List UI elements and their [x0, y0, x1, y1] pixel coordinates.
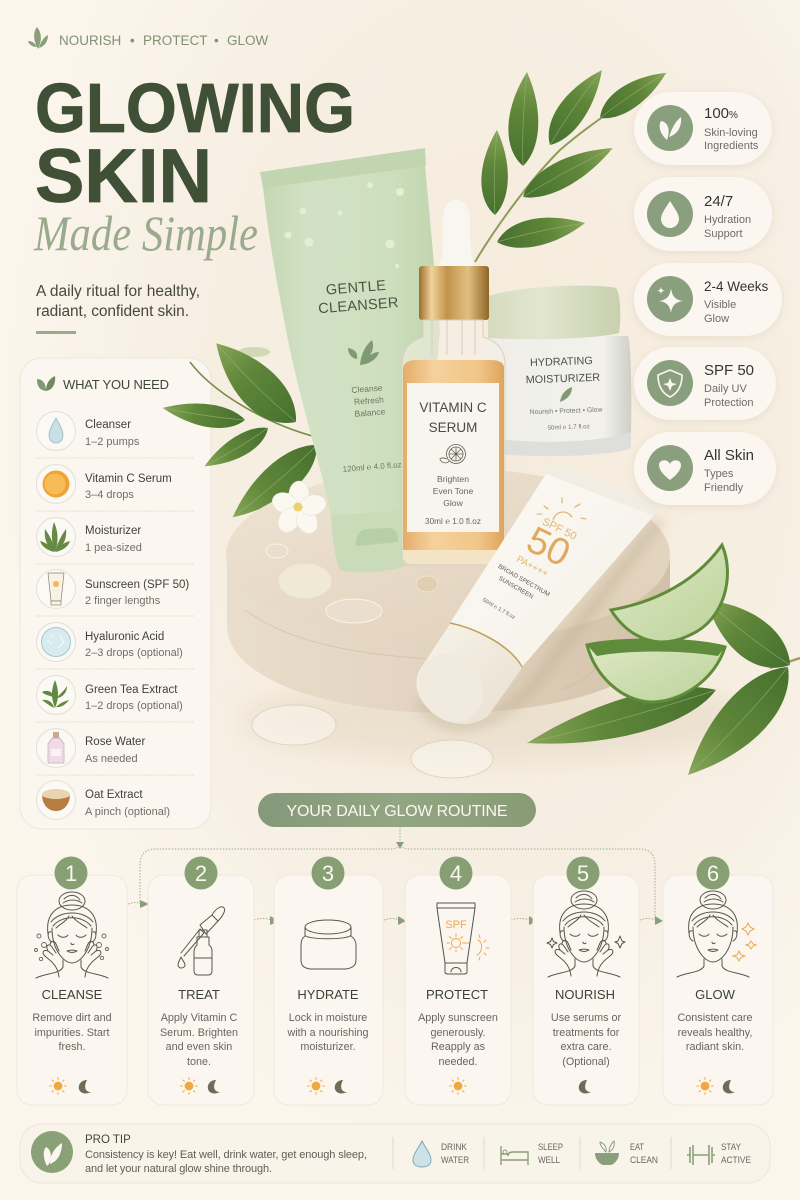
step 1: cleanse: impurities. Start	[34, 1027, 110, 1039]
sunscreen label: BROAD SPECTRUM	[497, 563, 551, 598]
habit: sleep well: WELL	[538, 1155, 560, 1165]
tip text: Consistency is key! Eat well, drink water, get enough sleep,	[85, 1149, 367, 1161]
step 3: hydrate: Lock in moisture	[289, 1012, 367, 1024]
habit: eat clean: EAT	[630, 1142, 644, 1152]
item: rose water	[36, 728, 145, 768]
habit: sleep well: SLEEP	[538, 1142, 563, 1152]
item: vitamin C serum: Vitamin C Serum	[85, 473, 172, 485]
step 5: nourish: NOURISH	[555, 987, 615, 1002]
panel card	[20, 358, 211, 829]
routine connector	[140, 827, 655, 920]
sunscreen label: SUNSCREEN	[497, 575, 534, 600]
habit: sleep well	[501, 1142, 563, 1165]
jar: hydrating moisturizer	[488, 286, 631, 456]
tube cap	[331, 507, 425, 572]
jar label: HYDRATING	[530, 355, 593, 369]
icon: glowing face	[677, 891, 756, 977]
step 1: cleanse: fresh.	[58, 1041, 86, 1053]
tagline text: •	[214, 33, 219, 48]
item: green tea extract	[36, 676, 183, 714]
stat: 100%: Skin-loving	[704, 127, 758, 139]
stat: SPF 50: Daily UV	[704, 383, 747, 395]
icon: face nourishing	[547, 891, 625, 977]
habit: eat clean	[595, 1141, 658, 1165]
icon: face cleansing	[34, 892, 108, 978]
step 5: nourish: Use serums or	[551, 1012, 621, 1024]
habit: stay active: STAY	[721, 1142, 741, 1152]
tip text: and let your natural glow shine through.	[85, 1163, 272, 1175]
habit: stay active	[687, 1142, 751, 1165]
icon: citrus slice	[440, 444, 466, 464]
item: rose water: As needed	[85, 753, 138, 765]
step 5: nourish: 5	[577, 861, 589, 886]
stat: SPF 50: Protection	[704, 397, 754, 409]
step 3: hydrate: 3	[322, 861, 334, 886]
stat: 100%: 100%	[704, 105, 738, 122]
header tagline	[28, 27, 269, 49]
routine banner	[258, 793, 536, 827]
tube: gentle cleanser	[260, 148, 440, 572]
branch: top-right leaves	[475, 62, 672, 262]
stats column	[634, 92, 782, 505]
item: rose water: Rose Water	[85, 736, 145, 748]
cleanser label: Refresh	[354, 394, 384, 407]
jar lid	[488, 286, 620, 339]
step 4: protect: Reapply as	[431, 1041, 486, 1053]
sunscreen label: 50	[520, 519, 576, 575]
stat: all skin: Friendly	[704, 482, 744, 494]
serum label text: VITAMIN C	[419, 400, 487, 415]
cleanser label: 120ml ℮ 4.0 fl.oz	[342, 460, 402, 474]
sunscreen cap	[416, 624, 522, 724]
tube crimp	[260, 148, 426, 188]
glass neck and shoulder	[402, 320, 505, 565]
step 3: hydrate	[274, 856, 383, 1105]
stat: all skin: Types	[704, 468, 734, 480]
item: cleanser: 1–2 pumps	[85, 436, 140, 448]
sunscreen label	[481, 498, 586, 621]
step 2: treat: TREAT	[178, 987, 220, 1002]
title	[33, 69, 355, 261]
cleanser label: Cleanse	[351, 382, 383, 395]
icon: dropper and bottle	[178, 907, 225, 975]
stat: 2-4 weeks: Visible	[704, 299, 736, 311]
serum label	[407, 383, 499, 532]
cleanser label	[316, 277, 412, 475]
item: oat extract: Oat Extract	[85, 789, 143, 801]
icon: sunscreen tube: SPF	[445, 919, 467, 931]
habit: drink water	[413, 1141, 469, 1167]
serum label text: Even Tone	[433, 486, 473, 496]
item: green tea extract: Green Tea Extract	[85, 684, 178, 696]
soft shadow light patches	[240, 680, 760, 760]
tagline text: •	[130, 33, 135, 48]
step 5: nourish	[533, 856, 639, 1105]
item: cleanser	[36, 412, 140, 450]
step 1: cleanse	[17, 856, 127, 1105]
step 2: treat: Serum. Brighten	[160, 1027, 238, 1039]
marble pedestal	[226, 468, 670, 713]
icon: cleanser sprig	[348, 340, 379, 365]
sunscreen shadow	[420, 520, 660, 725]
icon: jar	[301, 920, 356, 969]
tagline text: NOURISH	[59, 33, 121, 48]
title: GLOWING	[35, 69, 355, 147]
step 1: cleanse: 1	[65, 861, 77, 886]
step 3: hydrate: moisturizer.	[300, 1041, 356, 1053]
habit: drink water: WATER	[441, 1155, 469, 1165]
tube: SPF 50 sunscreen	[406, 462, 662, 735]
step 6: glow: 6	[707, 861, 719, 886]
tip text: PRO TIP	[85, 1134, 131, 1146]
pro tip bar	[20, 1124, 770, 1183]
step 1: cleanse: CLEANSE	[42, 987, 103, 1002]
stat: 100%: Ingredients	[704, 140, 759, 152]
habit: drink water: DRINK	[441, 1142, 467, 1152]
aloe and leaves: bottom right	[523, 545, 800, 792]
step 2: treat	[148, 856, 254, 1105]
title: Made Simple	[33, 205, 258, 261]
tagline text: PROTECT	[143, 33, 208, 48]
step 6: glow: GLOW	[695, 987, 736, 1002]
tube body	[263, 165, 440, 516]
branch: left leaves	[161, 330, 329, 531]
step 6: glow: radiant skin.	[686, 1041, 744, 1053]
routine steps	[17, 856, 773, 1105]
step 6: glow	[663, 856, 773, 1105]
step 3: hydrate: HYDRATE	[297, 987, 359, 1002]
habit: eat clean: CLEAN	[630, 1155, 658, 1165]
stat: all skin: All Skin	[704, 447, 754, 464]
aloe slice upper	[611, 545, 727, 642]
arrows between steps	[128, 900, 663, 925]
item: oat extract: A pinch (optional)	[85, 806, 170, 818]
aloe slice lower	[587, 640, 725, 702]
cleanser label: Balance	[354, 406, 386, 419]
jar label: MOISTURIZER	[526, 372, 601, 386]
icon: leaf	[44, 1143, 62, 1166]
step 5: nourish: extra care.	[560, 1041, 612, 1053]
serum label text: Glow	[443, 498, 464, 508]
stat: 2-4 weeks: 2-4 Weeks	[704, 279, 769, 294]
stat: 100%	[634, 92, 772, 165]
item: oat extract	[36, 780, 170, 820]
step 6: glow: reveals healthy,	[678, 1027, 752, 1039]
sunscreen label: 50ml ℮ 1.7 fl.oz	[481, 597, 516, 621]
bottle: vitamin C serum	[402, 200, 505, 565]
icon: sunscreen tube	[437, 903, 489, 974]
jar label	[525, 355, 603, 432]
item: hyaluronic acid	[36, 622, 183, 662]
sunscreen label: SPF 50	[540, 516, 578, 543]
stat: 24/7: 24/7	[704, 193, 733, 210]
intro text	[36, 283, 200, 334]
cleanser label: CLEANSER	[318, 295, 399, 317]
item: hyaluronic acid: 2–3 drops (optional)	[85, 647, 183, 659]
stat: SPF 50	[634, 347, 776, 420]
item: moisturizer: Moisturizer	[85, 525, 141, 537]
sunscreen crimp	[546, 462, 662, 516]
panel heading: WHAT YOU NEED	[63, 377, 169, 392]
jar body	[488, 336, 631, 456]
step 4: protect: PROTECT	[426, 987, 488, 1002]
item: cleanser: Cleanser	[85, 419, 131, 431]
step 5: nourish: treatments for	[553, 1027, 620, 1039]
item: vitamin C serum	[36, 464, 172, 504]
item: sunscreen	[36, 570, 189, 608]
water droplets on tube	[284, 182, 404, 268]
sunscreen label: PA++++	[515, 554, 550, 580]
item: moisturizer: 1 pea-sized	[85, 542, 142, 554]
habit: stay active: ACTIVE	[721, 1155, 751, 1165]
item: moisturizer	[36, 518, 142, 556]
step 4: protect: 4	[450, 861, 462, 886]
serum droplets on stone and surface	[252, 544, 493, 778]
step 4: protect	[405, 856, 511, 1105]
serum label text: 30ml ℮ 1.0 fl.oz	[425, 517, 481, 526]
step 6: glow: Consistent care	[677, 1012, 753, 1024]
gold band	[450, 623, 522, 667]
step 2: treat: Apply Vitamin C	[161, 1012, 238, 1024]
icon: jar sprig	[560, 387, 572, 402]
serum label text: SERUM	[429, 420, 477, 435]
icon: sprig	[28, 27, 48, 49]
stat: SPF 50: SPF 50	[704, 362, 754, 379]
step 2: treat: tone.	[187, 1056, 211, 1068]
jar label: Nourish • Protect • Glow	[530, 407, 603, 416]
item: sunscreen: Sunscreen (SPF 50)	[85, 579, 189, 591]
panel: what you need	[20, 358, 211, 829]
step 2: treat: 2	[195, 861, 207, 886]
tip text	[85, 1134, 367, 1175]
item: green tea extract: 1–2 drops (optional)	[85, 700, 183, 712]
serum liquid	[403, 360, 504, 550]
item: vitamin C serum: 3–4 drops	[85, 489, 134, 501]
stat: 24/7: Hydration	[704, 214, 751, 226]
jar label: 50ml ℮ 1.7 fl.oz	[547, 423, 590, 432]
gold collar	[419, 266, 489, 320]
step 4: protect: generously.	[430, 1027, 486, 1039]
stat: 24/7: Support	[704, 228, 743, 240]
stat: 2-4 weeks	[634, 263, 782, 336]
flower	[269, 481, 328, 537]
step 3: hydrate: with a nourishing	[286, 1027, 369, 1039]
title: SKIN	[35, 134, 212, 219]
item: sunscreen: 2 finger lengths	[85, 595, 161, 607]
stat: 2-4 weeks: Glow	[704, 313, 729, 325]
dropper bulb	[438, 200, 475, 266]
intro text: radiant, confident skin.	[36, 303, 189, 320]
item: hyaluronic acid: Hyaluronic Acid	[85, 631, 164, 643]
step 1: cleanse: Remove dirt and	[32, 1012, 112, 1024]
serum label text	[419, 400, 487, 526]
intro text: A daily ritual for healthy,	[36, 283, 200, 300]
step 2: treat: and even skin	[166, 1041, 232, 1053]
serum label text: Brighten	[437, 474, 469, 484]
hero: product scene	[161, 62, 800, 792]
step 5: nourish: (Optional)	[562, 1056, 610, 1068]
step 4: protect: needed.	[438, 1056, 478, 1068]
cleanser label: GENTLE	[325, 278, 387, 299]
stat: 24/7	[634, 177, 772, 251]
tagline text: GLOW	[227, 33, 269, 48]
stat: all skin	[634, 432, 776, 505]
step 4: protect: Apply sunscreen	[418, 1012, 498, 1024]
routine banner: YOUR DAILY GLOW ROUTINE	[286, 803, 508, 820]
sunscreen body	[450, 462, 662, 667]
